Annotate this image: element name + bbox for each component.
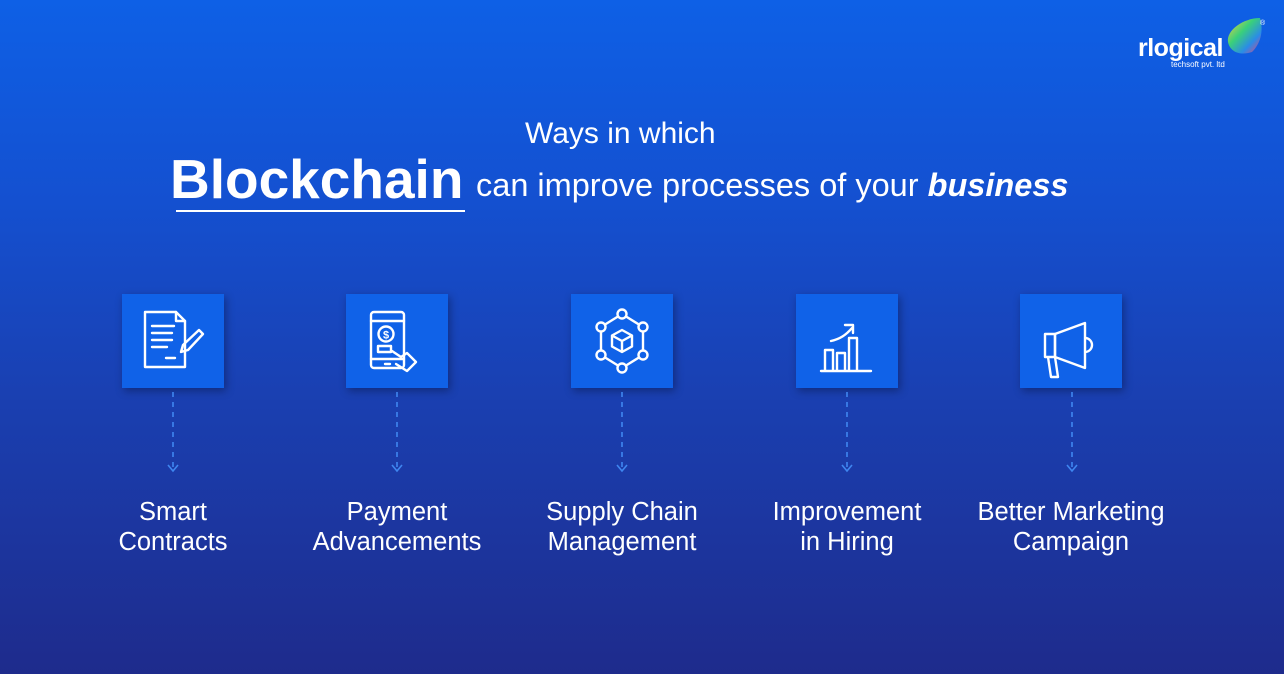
icon: payment: $ xyxy=(383,330,389,342)
label: Payment: Advancements xyxy=(313,528,481,556)
icon: smart contract xyxy=(122,294,224,388)
title xyxy=(170,117,1068,212)
label: Payment xyxy=(312,498,481,556)
icon: supply chain xyxy=(571,294,673,388)
label: Smart Contracts xyxy=(118,498,228,556)
icon: megaphone xyxy=(1020,294,1122,388)
logo: rlogical xyxy=(1138,34,1223,62)
icon: hiring chart xyxy=(796,294,898,388)
label: Supply chain xyxy=(546,498,698,556)
label: Smart Contracts: Smart xyxy=(139,498,207,526)
label: Smart Contracts: Contracts xyxy=(118,528,228,556)
label: Marketing: Better Marketing xyxy=(977,498,1165,526)
icon: payment xyxy=(346,294,448,388)
title: can improve processes of your business xyxy=(476,167,1068,203)
label: Supply chain: Management xyxy=(548,528,696,556)
label: Marketing xyxy=(977,498,1165,556)
title: Blockchain xyxy=(170,148,463,210)
title: Ways in which xyxy=(525,117,716,150)
logo: ® xyxy=(1260,19,1266,27)
label: Supply chain: Supply Chain xyxy=(546,498,698,526)
label: Marketing: Campaign xyxy=(1013,528,1129,556)
label: Hiring xyxy=(773,498,922,556)
label: Payment: Payment xyxy=(347,498,447,526)
logo: techsoft pvt. ltd xyxy=(1171,60,1225,69)
label: Hiring: in Hiring xyxy=(800,528,894,556)
label: Hiring: Improvement xyxy=(773,498,921,526)
logo xyxy=(1138,18,1266,69)
